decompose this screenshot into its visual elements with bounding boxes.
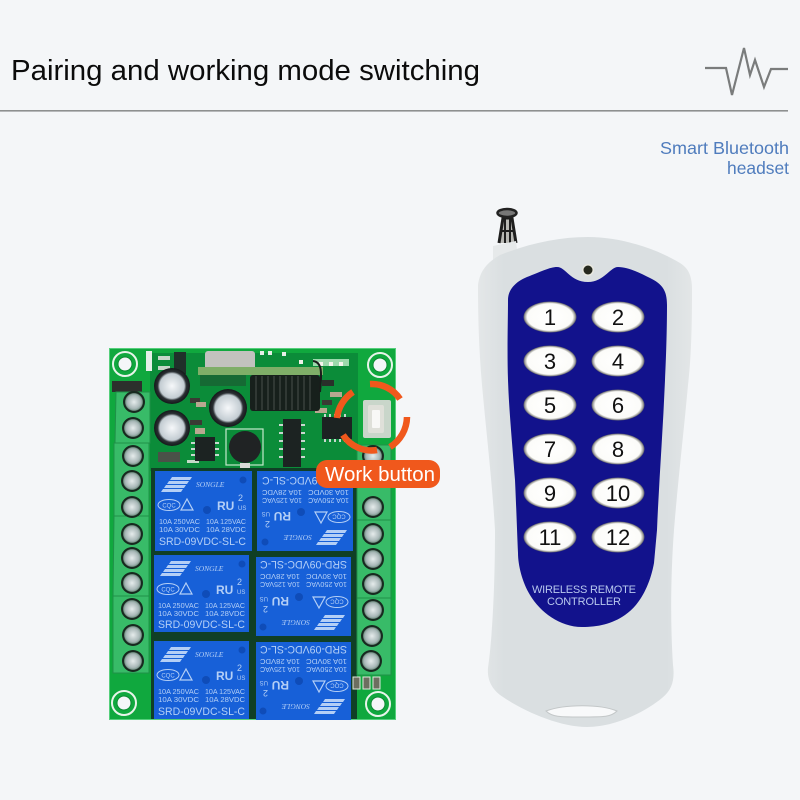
relay: middle left: 10A 125VAC xyxy=(205,601,245,610)
relay: top left: 10A 28VDC xyxy=(206,525,246,534)
remote label: WIRELESS REMOTE xyxy=(532,584,636,596)
button 3 xyxy=(524,346,576,376)
title: Pairing and working mode switching xyxy=(11,55,480,87)
capacitors xyxy=(154,368,247,446)
button 9: 9 xyxy=(544,481,556,506)
right terminal blocks xyxy=(357,445,391,675)
relay: middle right: 2 xyxy=(263,604,268,614)
relay: bottom left: 10A 28VDC xyxy=(205,695,245,704)
icon: pulse wave xyxy=(705,48,788,95)
button 9 xyxy=(524,478,576,508)
relay: bottom right: SONGLE xyxy=(281,702,310,711)
button 1 xyxy=(524,302,576,332)
relay: middle left: 2 xyxy=(237,577,242,587)
button 12 xyxy=(592,522,644,552)
button 2 xyxy=(592,302,644,332)
relay: middle right xyxy=(256,557,351,636)
relay: top right: 10A 250VAC xyxy=(308,496,349,505)
button 6: 6 xyxy=(612,393,624,418)
relay: middle right: 10A 30VDC xyxy=(306,572,347,581)
relay: top left xyxy=(155,471,252,551)
relay: bottom left: US xyxy=(237,676,245,682)
button 7 xyxy=(524,434,576,464)
caption: smart bluetooth headset: Smart Bluetooth xyxy=(660,138,789,158)
circuit traces and small parts xyxy=(112,351,380,689)
relay: bottom right: 10A 250VAC xyxy=(306,665,347,674)
relay: middle right: 10A 28VDC xyxy=(260,572,300,581)
board edge highlight xyxy=(110,348,396,720)
relay: bottom right xyxy=(256,642,351,720)
relay: bottom right: CQC xyxy=(330,682,344,688)
work button switch xyxy=(363,400,391,438)
button 7: 7 xyxy=(544,437,556,462)
right terminal screws xyxy=(360,445,384,672)
button 4 xyxy=(592,346,644,376)
relay: middle left: 10A 250VAC xyxy=(158,601,199,610)
relay: bottom left: 2 xyxy=(237,663,242,673)
relay: top left: RU xyxy=(217,499,234,513)
relay: top right xyxy=(257,471,353,551)
relay: top right: 2 xyxy=(265,519,270,529)
blue face panel xyxy=(508,267,667,627)
relay: middle left: CQC xyxy=(161,588,175,594)
relay: bottom left: RU xyxy=(216,669,233,683)
rf pins xyxy=(200,375,246,386)
relay: middle left: US xyxy=(237,590,245,596)
relay: middle left: 10A 28VDC xyxy=(205,609,245,618)
relay: middle left: SONGLE xyxy=(195,564,224,573)
relay: top right: 10A 125VAC xyxy=(262,496,302,505)
relay: middle right: US xyxy=(260,595,268,601)
button 1: 1 xyxy=(544,305,556,330)
button 4: 4 xyxy=(612,349,624,374)
relay: bottom right: SRD-09VDC-SL-C xyxy=(260,643,347,655)
remote body xyxy=(478,237,692,727)
inductor xyxy=(229,431,261,463)
remote control xyxy=(478,209,692,727)
relay: middle left: RU xyxy=(216,583,233,597)
relay: top right: US xyxy=(262,510,270,516)
relay: top right: CQC xyxy=(332,512,346,518)
relay: bottom left: 10A 30VDC xyxy=(158,695,199,704)
relay: top left: 10A 125VAC xyxy=(206,517,246,526)
header rule xyxy=(0,110,788,112)
relay: middle left: SRD-09VDC-SL-C xyxy=(158,619,245,631)
callout: work button xyxy=(316,460,440,488)
relay: top right: 10A 28VDC xyxy=(262,488,302,497)
button 5: 5 xyxy=(544,393,556,418)
relay: bottom right: RU xyxy=(272,678,289,692)
darker central copper area xyxy=(150,353,358,471)
button 8 xyxy=(592,434,644,464)
relay: top right: SONGLE xyxy=(283,533,312,542)
antenna xyxy=(493,209,518,262)
relay: bottom left xyxy=(154,641,249,719)
buttons xyxy=(524,302,644,552)
button 6 xyxy=(592,390,644,420)
relay: top left: CQC xyxy=(162,504,176,510)
relay: middle right: SRD-09VDC-SL-C xyxy=(260,558,347,570)
left terminal screws xyxy=(121,391,145,672)
chips xyxy=(191,414,352,467)
circuit board xyxy=(109,348,396,720)
status led xyxy=(582,264,594,276)
relay: middle right: SONGLE xyxy=(281,618,310,627)
lanyard hole xyxy=(546,706,617,717)
button 11: 11 xyxy=(539,525,561,550)
relay: middle right: RU xyxy=(272,594,289,608)
callout: work button: Work button xyxy=(325,464,435,486)
antenna coil xyxy=(250,361,321,411)
button 8: 8 xyxy=(612,437,624,462)
button 10: 10 xyxy=(606,481,630,506)
relay: bottom right: US xyxy=(260,679,268,685)
button 10 xyxy=(592,478,644,508)
rf module xyxy=(198,367,323,375)
button 3: 3 xyxy=(544,349,556,374)
mounting holes xyxy=(112,352,392,716)
relay: bottom left: SONGLE xyxy=(195,650,224,659)
relay: bottom left: 10A 250VAC xyxy=(158,687,199,696)
button 11 xyxy=(524,522,576,552)
relay: top left: 10A 250VAC xyxy=(159,517,200,526)
caption: smart bluetooth headset: headset xyxy=(727,158,789,178)
button 2: 2 xyxy=(612,305,624,330)
relay: middle right: 10A 125VAC xyxy=(260,580,300,589)
dashed highlight circle around work button xyxy=(337,384,407,450)
button 5 xyxy=(524,390,576,420)
relay: bottom right: 2 xyxy=(263,688,268,698)
relay: middle right: 10A 250VAC xyxy=(306,580,347,589)
relay: bottom left: 10A 125VAC xyxy=(205,687,245,696)
board base xyxy=(109,348,396,720)
relay: top left: 2 xyxy=(238,493,243,503)
relay: top right: 10A 30VDC xyxy=(308,488,349,497)
relay: middle left: 10A 30VDC xyxy=(158,609,199,618)
relay shadow area xyxy=(151,468,357,720)
relay: top left: SONGLE xyxy=(196,480,225,489)
crystal xyxy=(205,351,255,371)
relay: top left: SRD-09VDC-SL-C xyxy=(159,536,246,548)
relay: bottom right: 10A 125VAC xyxy=(260,665,300,674)
button 12: 12 xyxy=(606,525,630,550)
remote label: CONTROLLER xyxy=(547,596,621,608)
relay: middle left xyxy=(154,555,249,632)
relay: bottom left: SRD-09VDC-SL-C xyxy=(158,706,245,718)
relay: top left: 10A 30VDC xyxy=(159,525,200,534)
relay: top right: SRD-09VDC-SL-C xyxy=(262,474,349,486)
relay: top left: US xyxy=(238,506,246,512)
relay: bottom right: 10A 30VDC xyxy=(306,657,347,666)
left terminal blocks xyxy=(113,392,150,673)
relay: bottom left: CQC xyxy=(161,674,175,680)
relay: bottom right: 10A 28VDC xyxy=(260,657,300,666)
relay: top right: RU xyxy=(274,509,291,523)
relay: middle right: CQC xyxy=(330,598,344,604)
